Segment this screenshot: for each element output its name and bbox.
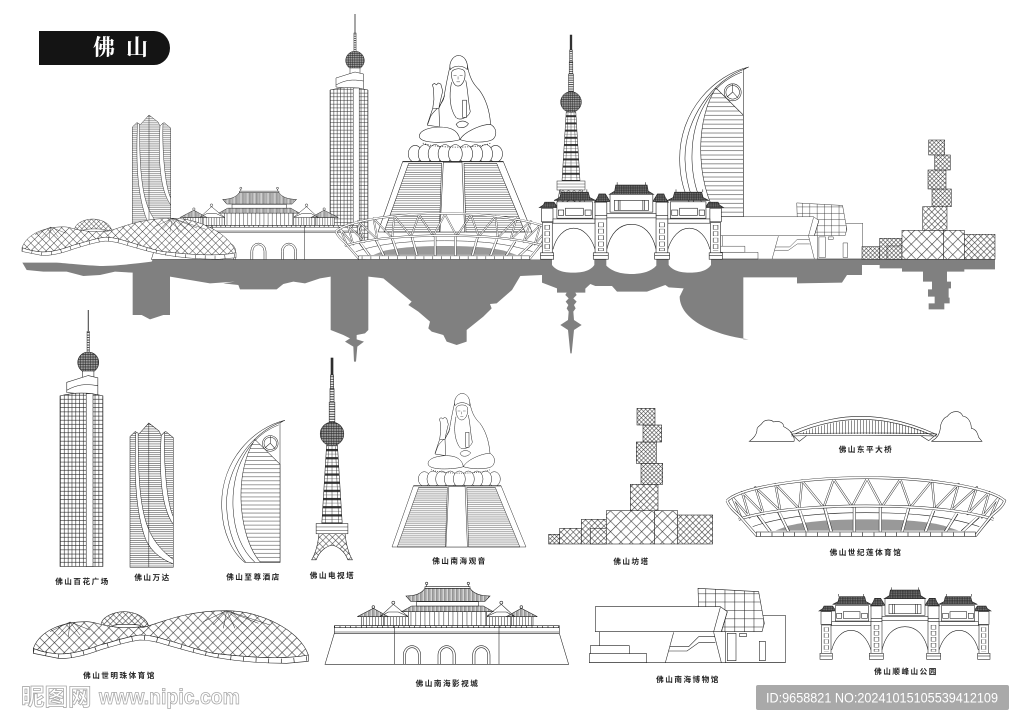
- center roof: [884, 590, 926, 599]
- arch hangers: [800, 420, 927, 434]
- inner pillar block: [871, 606, 882, 653]
- landmark: Zhizun hotel: [222, 420, 285, 562]
- lattice shaft: [322, 445, 342, 524]
- grid volume: [698, 588, 764, 632]
- title: 佛山: 山: [126, 35, 148, 60]
- landmark: Wanda tower: [130, 423, 173, 567]
- side roof: [833, 597, 871, 604]
- roof truss: [732, 479, 999, 519]
- crossed legs right: [463, 453, 494, 469]
- antenna ladder upper: [330, 375, 334, 389]
- watermark: image ID bar: ID:9658821 NO:20241015105539412109: [766, 690, 998, 706]
- facade: [130, 423, 173, 567]
- label: 佛山南海影视城: 佛山南海影视城: [416, 678, 479, 688]
- label: 佛山世纪莲体育馆: 佛山世纪莲体育馆: [830, 547, 902, 557]
- platform: [316, 524, 348, 534]
- outer body: [821, 612, 832, 624]
- label: 佛山电视塔: 佛山电视塔: [310, 570, 355, 580]
- antenna tip: [331, 358, 333, 375]
- watermark: nipic: [21, 684, 240, 710]
- landmark: Century Lotus stadium: [727, 478, 1005, 537]
- doors: [727, 633, 765, 661]
- face: [456, 405, 468, 420]
- veil drape lines: [455, 415, 472, 449]
- shell fan ribs: [50, 611, 270, 637]
- skyline: Nanhai museum: [715, 203, 863, 259]
- skyline: Fang tower: [862, 140, 995, 259]
- lotus petals: [418, 471, 500, 487]
- skyline: Baihua plaza tower: [330, 14, 368, 241]
- collar: [83, 371, 94, 378]
- bottom band: [33, 635, 308, 663]
- outer roof: [819, 606, 836, 611]
- gate half left: [819, 594, 885, 659]
- skyline: Shunfeng gate: [539, 182, 723, 259]
- steps: [589, 632, 647, 663]
- center stair: [446, 486, 467, 547]
- robe body: [435, 402, 490, 467]
- lower bowl: [742, 506, 990, 537]
- skyline: Century Lotus stadium: [336, 213, 552, 260]
- main shell lattice: [33, 611, 308, 658]
- antenna ladder lower: [329, 402, 335, 424]
- columns: [758, 506, 979, 532]
- landmark: Dongping bridge: [749, 412, 982, 441]
- center panel: [885, 599, 925, 615]
- middle ring: [739, 506, 994, 519]
- label: 佛山至尊酒店: 佛山至尊酒店: [226, 572, 281, 582]
- raised hand: [435, 417, 450, 455]
- curved band left: [135, 432, 173, 564]
- spire: [87, 310, 89, 333]
- sail outline: [222, 420, 285, 562]
- spire lattice: [87, 331, 89, 353]
- lotus rim: [431, 470, 490, 473]
- skyline: Zhizun hotel: [680, 67, 749, 222]
- label: 佛山百花广场: 佛山百花广场: [55, 576, 110, 586]
- skyline: TV tower: [553, 35, 589, 213]
- skyline: Guanyin statue: [378, 55, 532, 232]
- arch ribs: [790, 416, 937, 435]
- legs: [312, 534, 352, 560]
- label: 佛山顺峰山公园: 佛山顺峰山公园: [874, 666, 938, 676]
- label: 佛山东平大桥: 佛山东平大桥: [839, 444, 893, 454]
- center beam: [882, 617, 928, 621]
- landmark: Fang tower: [549, 408, 713, 544]
- label: 佛山坊塔: 佛山坊塔: [613, 556, 650, 566]
- tower body grid: [60, 393, 103, 567]
- title: 佛山: [39, 31, 170, 65]
- landmark: Guanyin statue: [392, 393, 526, 547]
- curved band right: [160, 432, 173, 524]
- label: 佛山万达: 佛山万达: [134, 572, 171, 582]
- main hall lower roof: [402, 606, 493, 612]
- landmark: Baihua plaza tower: [60, 310, 103, 567]
- label: 佛山南海观音: 佛山南海观音: [432, 556, 487, 566]
- left trees: [749, 420, 794, 441]
- landmark: TV tower: [312, 358, 352, 560]
- side panel: [835, 606, 869, 621]
- gate wall backing: [822, 608, 988, 659]
- label: 佛山世明珠体育馆: 佛山世明珠体育馆: [83, 670, 156, 680]
- statue: [418, 393, 500, 487]
- scroll: [466, 432, 469, 447]
- logo: [262, 436, 278, 451]
- side pavilions left: [357, 601, 408, 626]
- hood: [455, 393, 470, 406]
- crossed legs left: [428, 456, 463, 469]
- crown: [67, 376, 98, 396]
- main box: [595, 607, 727, 632]
- entrance frame: [665, 632, 721, 663]
- city wall: [325, 626, 569, 664]
- lower hand: [460, 450, 471, 456]
- center strip: [86, 394, 93, 567]
- skyline: buildings above the reflection: [22, 14, 995, 260]
- antenna ladder middle: [330, 389, 334, 402]
- deck: [791, 433, 937, 441]
- ground line: [589, 662, 785, 664]
- landmark: Shimingzhu gymnasium: [33, 611, 308, 663]
- landmark: Shunfeng Mountain park gate: [819, 587, 991, 659]
- wall arches: [403, 646, 490, 664]
- right trees: [931, 412, 982, 441]
- watermark: nipic: www.nipic.com: [98, 686, 240, 709]
- sphere: [320, 422, 344, 446]
- skylight slit: [113, 624, 141, 628]
- outer rim: [727, 478, 1005, 536]
- stacked cubes: [549, 408, 713, 544]
- watermark: nipic: 昵图网: [21, 684, 92, 710]
- outer pillar: [822, 625, 831, 653]
- hatched facade: [241, 439, 280, 562]
- right block: [725, 615, 785, 663]
- small roof: [870, 598, 885, 606]
- label: 佛山南海博物馆: 佛山南海博物馆: [656, 674, 720, 684]
- side arch: [832, 630, 871, 650]
- watermark: image ID bar: [756, 685, 1009, 710]
- small dome: [101, 612, 149, 627]
- base: [756, 532, 975, 537]
- skyline: Wanda tower: [132, 115, 171, 243]
- landmark: Nanhai museum: [589, 588, 785, 663]
- title: 佛山: 佛: [93, 35, 115, 60]
- side beam: [832, 622, 871, 626]
- sphere: [78, 352, 99, 373]
- inner sail curves: [227, 422, 282, 562]
- center arch: [882, 627, 928, 650]
- side pavilions right: [486, 601, 537, 626]
- stepped base: [392, 486, 526, 547]
- skyline: Shimingzhu gymnasium: [22, 218, 236, 259]
- seating band: [775, 519, 959, 531]
- skyline reflection silhouette: [22, 259, 995, 362]
- main hall columns: [408, 611, 487, 626]
- gate half right: [925, 594, 991, 659]
- skyline: Nanhai film city: [151, 187, 366, 259]
- main hall upper roof: [406, 588, 490, 601]
- landmark: Nanhai film city: [325, 582, 569, 664]
